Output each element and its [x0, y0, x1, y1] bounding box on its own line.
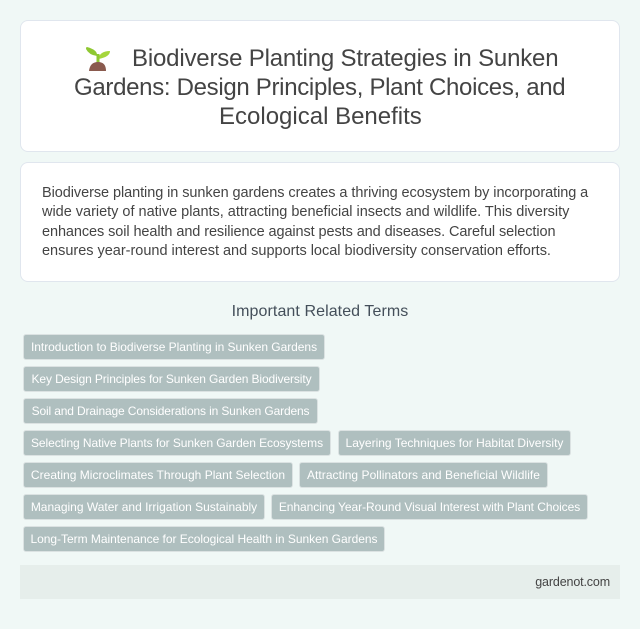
- tag: Creating Microclimates Through Plant Selection: [31, 468, 285, 482]
- tag: [23, 462, 293, 488]
- tag: [299, 462, 548, 488]
- tag: Managing Water and Irrigation Sustainably: [31, 500, 257, 514]
- tag: Long-Term Maintenance for Ecological Health in Sunken Gardens: [30, 532, 378, 546]
- tag: [23, 494, 265, 520]
- tag: [271, 494, 588, 520]
- title panel: Biodiverse Planting Strategies in Sunken: [132, 45, 558, 72]
- tag: [23, 334, 325, 360]
- tag: Introduction to Biodiverse Planting in Sunken Gardens: [31, 340, 317, 354]
- title panel: Gardens: Design Principles, Plant Choices, and: [74, 74, 565, 101]
- title panel: [20, 20, 620, 152]
- summary panel: enhances soil health and resilience against pests and diseases. Careful selection: [42, 224, 555, 240]
- tag: Attracting Pollinators and Beneficial Wildlife: [307, 468, 540, 482]
- tag: Soil and Drainage Considerations in Sunken Gardens: [32, 404, 309, 418]
- tag: [23, 366, 320, 392]
- section heading: Important Related Terms: [232, 303, 408, 320]
- icon: seedling: [86, 47, 110, 71]
- tag: [23, 398, 318, 424]
- title panel: Ecological Benefits: [219, 103, 422, 130]
- tag: Selecting Native Plants for Sunken Garden Ecosystems: [31, 436, 323, 450]
- title text: [74, 45, 565, 130]
- summary panel: Biodiverse planting in sunken gardens creates a thriving ecosystem by incorporating a: [42, 185, 588, 201]
- tag: [338, 430, 571, 456]
- tag: [23, 526, 385, 552]
- tag: [23, 430, 331, 456]
- tag: Enhancing Year-Round Visual Interest with Plant Choices: [279, 500, 580, 514]
- summary panel: wide variety of native plants, attracting beneficial insects and wildlife. This diversity: [42, 204, 569, 220]
- tag: Key Design Principles for Sunken Garden Biodiversity: [32, 372, 311, 386]
- footer bar: [20, 565, 620, 599]
- summary text: [42, 185, 588, 259]
- footer source: gardenot.com: [535, 575, 610, 589]
- tag: Layering Techniques for Habitat Diversity: [346, 436, 563, 450]
- related terms tags: [23, 334, 588, 552]
- summary panel: [20, 162, 620, 282]
- summary panel: ensures year-round interest and supports local biodiversity conservation efforts.: [42, 243, 551, 259]
